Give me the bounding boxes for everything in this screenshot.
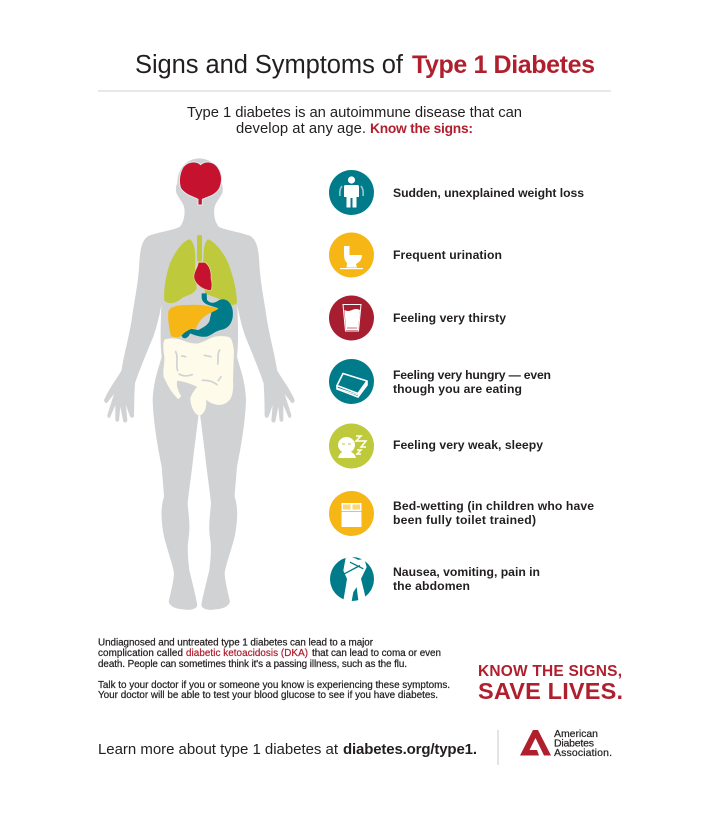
- label: bed-wetting: been fully toilet trained): [393, 513, 536, 527]
- icon: sandwich: [329, 359, 374, 404]
- icon: bed: [329, 491, 374, 536]
- intro text: [187, 105, 522, 137]
- body illustration: [104, 158, 295, 610]
- heart: [194, 262, 212, 291]
- label: nausea: [393, 565, 540, 593]
- warning paragraph: Undiagnosed and untreated type 1 diabetes can lead to a major: [98, 638, 374, 648]
- icon: sleepy: [329, 424, 374, 468]
- intro text: Know the signs:: [370, 121, 473, 136]
- title: Type 1 Diabetes: [412, 51, 595, 79]
- label: nausea: the abdomen: [393, 579, 470, 593]
- brain: [179, 162, 221, 205]
- label: hungry: [393, 368, 551, 396]
- logo: American Diabetes Association: [520, 728, 612, 759]
- warning paragraph: complication called: [98, 648, 183, 659]
- footer link: Learn more about type 1 diabetes at: [98, 741, 339, 758]
- label: nausea: Nausea, vomiting, pain in: [393, 565, 540, 579]
- label: sleepy: Feeling very weak, sleepy: [393, 438, 543, 452]
- advice paragraph: Your doctor will be able to test your blood glucose to see if you have diabetes.: [98, 690, 438, 701]
- label: bed-wetting: [393, 499, 594, 527]
- label: hungry: though you are eating: [393, 382, 522, 396]
- logo: American Diabetes Association: Diabetes: [554, 738, 594, 750]
- warning paragraph: diabetic ketoacidosis (DKA): [186, 648, 308, 659]
- lungs: [164, 235, 237, 305]
- warning paragraph: [98, 638, 441, 670]
- label: hungry: Feeling very hungry — even: [393, 368, 551, 382]
- advice paragraph: [98, 680, 450, 701]
- label: thirsty: Feeling very thirsty: [393, 311, 506, 325]
- warning paragraph: death. People can sometimes think it's a passing illness, such as the flu.: [98, 659, 407, 670]
- intro text: develop at any age.: [236, 121, 366, 137]
- label: weight loss: Sudden, unexplained weight loss: [393, 186, 584, 200]
- icon: toilet: [329, 232, 374, 278]
- slogan: SAVE LIVES.: [478, 678, 623, 704]
- stomach: [182, 293, 233, 338]
- footer link: diabetes.org/type1.: [343, 741, 477, 758]
- logo: American Diabetes Association: Association.: [554, 747, 612, 759]
- liver: [168, 305, 218, 337]
- icon: weight loss: [329, 170, 374, 215]
- logo: American Diabetes Association: American: [554, 728, 598, 740]
- footer link: [98, 741, 477, 758]
- slogan: KNOW THE SIGNS,: [478, 663, 622, 680]
- label: bed-wetting: Bed-wetting (in children who have: [393, 499, 594, 513]
- icon: abdominal pain: [330, 556, 374, 601]
- title: Signs and Symptoms of: [135, 51, 404, 79]
- title: [135, 51, 595, 79]
- intro text: Type 1 diabetes is an autoimmune disease that can: [187, 105, 522, 121]
- label: urination: Frequent urination: [393, 248, 502, 262]
- advice paragraph: Talk to your doctor if you or someone you know is experiencing these symptoms.: [98, 680, 450, 691]
- intestines: [164, 337, 233, 415]
- body silhouette: [104, 158, 295, 610]
- warning paragraph: that can lead to coma or even: [312, 648, 441, 659]
- slogan: [478, 663, 623, 704]
- icon: glass of water: [329, 296, 374, 340]
